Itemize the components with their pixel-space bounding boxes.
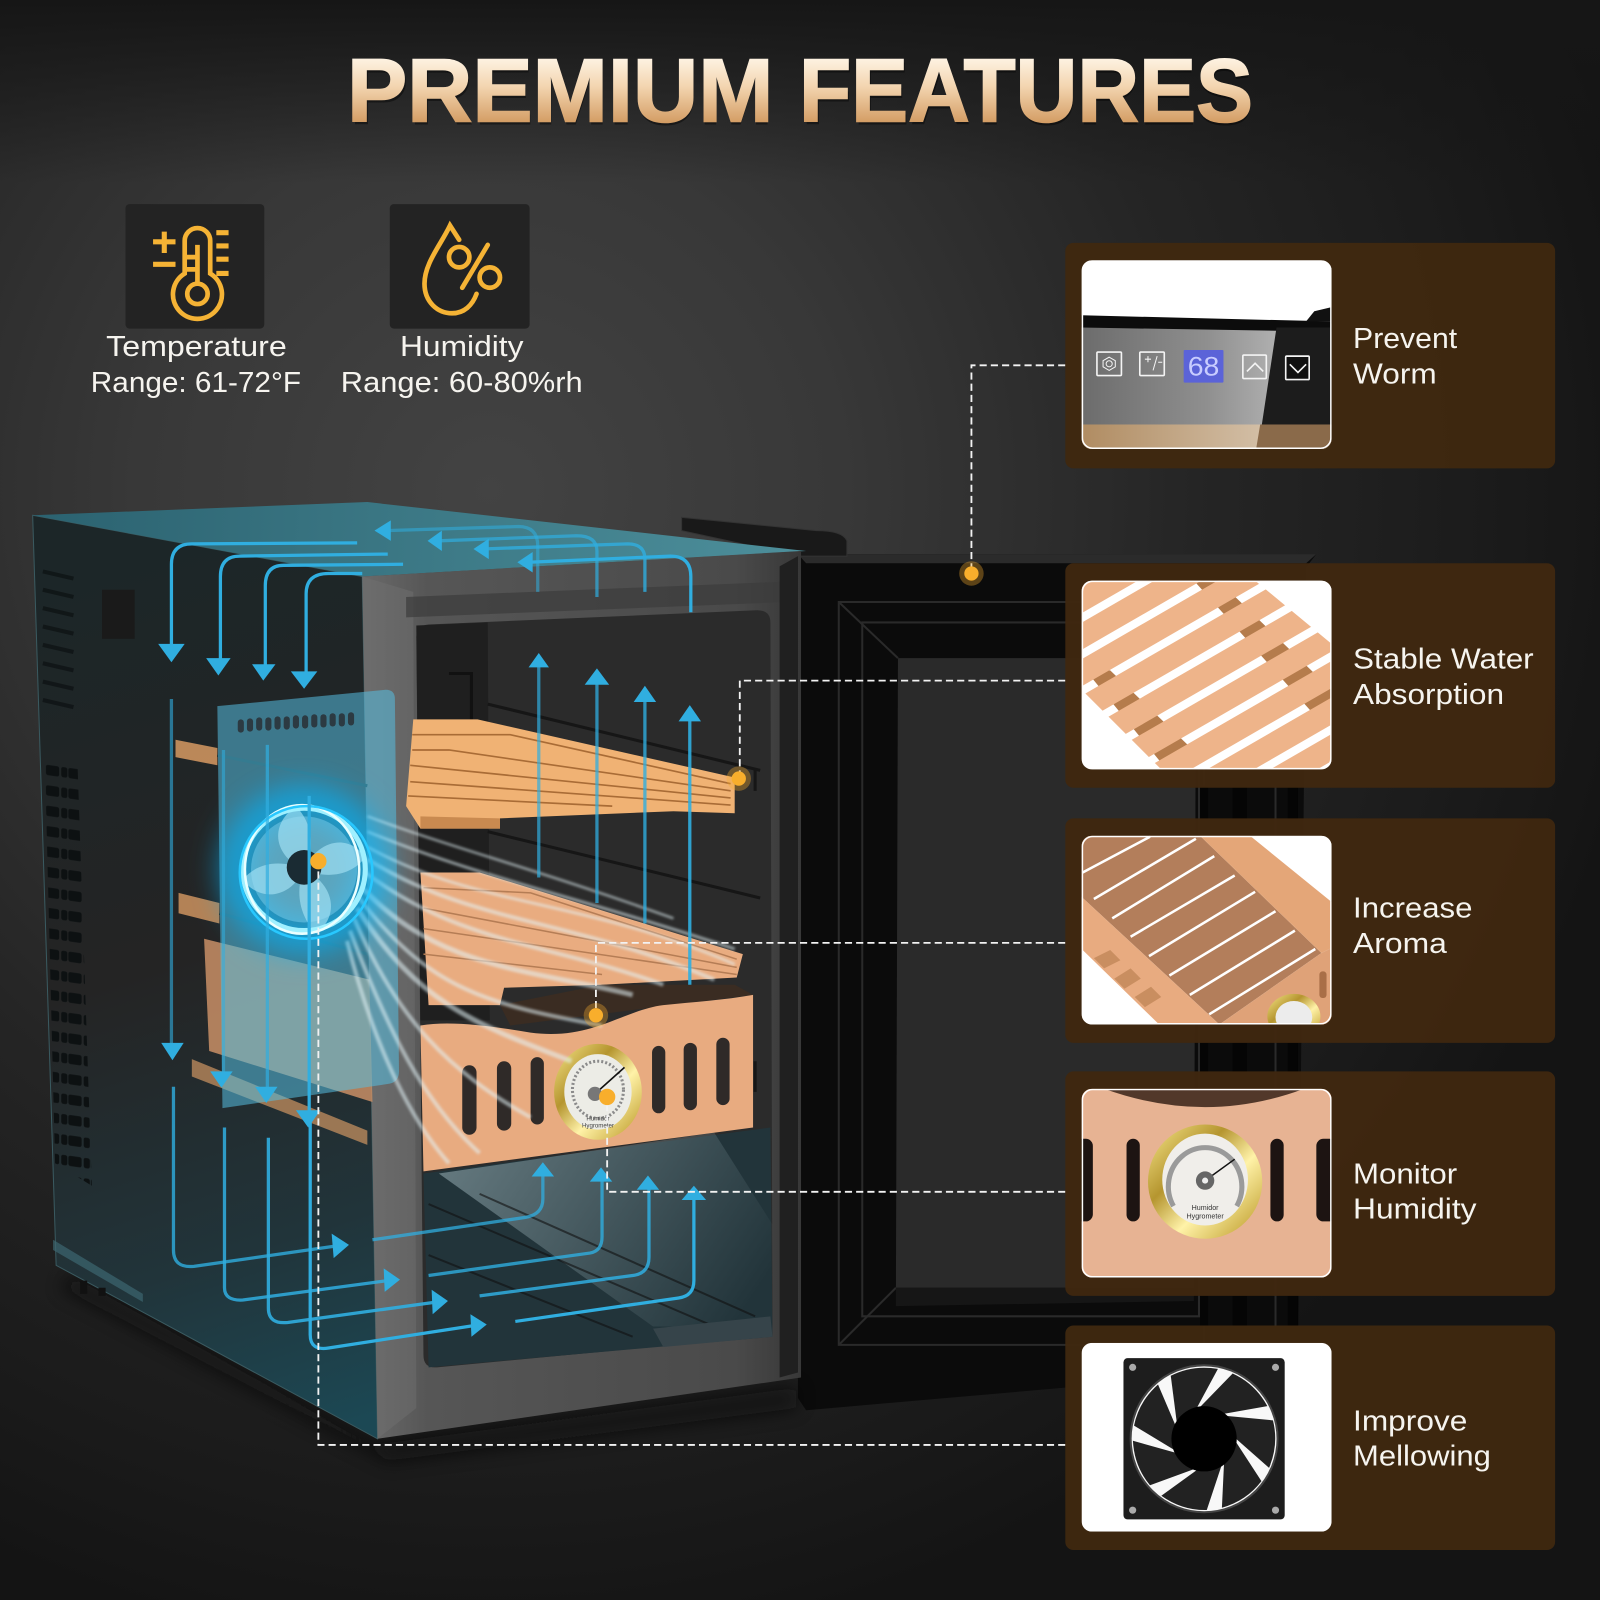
airflow arrows [158, 520, 706, 1348]
image: wooden shelf [1082, 580, 1332, 770]
label: increase aroma: Aroma [1353, 928, 1447, 960]
translucent blue panel [217, 690, 399, 1108]
icon: humidity drop [390, 204, 530, 329]
arrows descending on the left side [158, 543, 403, 1128]
text: humidity range: Humidity [400, 331, 524, 363]
image: hygrometer: Hygrometer [1186, 1212, 1224, 1220]
text: temperature range [91, 331, 301, 399]
spec: humidity [341, 204, 583, 399]
label: prevent worm: Prevent [1353, 323, 1457, 355]
airflow streams [347, 816, 735, 1163]
icon: thermometer [126, 204, 264, 329]
title: PREMIUM [349, 44, 773, 144]
image: wooden tray [1082, 836, 1332, 1024]
label: stable water absorption: Absorption [1353, 679, 1504, 711]
label: improve mellowing: Mellowing [1353, 1440, 1491, 1472]
text: temperature range: Temperature [106, 331, 287, 363]
label: monitor humidity: Monitor [1353, 1159, 1458, 1191]
label: stable water absorption [1353, 643, 1534, 711]
door [682, 517, 1316, 1410]
arrows rising through the chamber [529, 653, 701, 985]
door handle [682, 517, 847, 556]
card: increase aroma [1065, 818, 1555, 1043]
hygrometer: Hygrometer [582, 1123, 614, 1130]
card: monitor humidity [1065, 1071, 1555, 1296]
middle shelf [420, 872, 743, 1005]
image: control panel: 68 [1188, 352, 1219, 382]
text: humidity range: Range: 60-80%rh [341, 367, 583, 399]
label: improve mellowing: Improve [1353, 1406, 1467, 1438]
title: FEATURES [799, 41, 1253, 141]
text: humidity range [341, 331, 583, 399]
text: temperature range: Range: 61-72°F [91, 367, 301, 399]
image: hygrometer [1082, 1088, 1332, 1278]
arrows along the floor [173, 1087, 487, 1348]
image: hygrometer: Humidor [1192, 1204, 1219, 1212]
cabinet top glass [33, 502, 806, 577]
spec: temperature [91, 204, 301, 399]
arrows across the top [374, 520, 691, 612]
cabinet shadow [61, 1276, 796, 1461]
left-side shelves seen through glass [176, 740, 372, 1145]
callout dots [310, 561, 984, 1105]
label: stable water absorption: Stable Water [1353, 643, 1534, 675]
upper shelf [406, 719, 735, 829]
chamber interior [416, 610, 772, 1367]
label: increase aroma: Increase [1353, 892, 1472, 924]
title: FEATURES [801, 44, 1253, 144]
cabinet left side [33, 515, 378, 1439]
hygrometer: Humidor [586, 1115, 610, 1122]
label: prevent worm [1353, 323, 1457, 391]
callout lines [318, 365, 1065, 1445]
image: cooling fan [1082, 1342, 1332, 1532]
humidor drawer [420, 985, 753, 1171]
fan glow [237, 802, 372, 939]
label: monitor humidity: Humidity [1353, 1193, 1477, 1225]
card: improve mellowing [1065, 1326, 1555, 1550]
label: prevent worm: Worm [1353, 359, 1437, 391]
label: increase aroma [1353, 892, 1472, 960]
label: improve mellowing [1353, 1406, 1491, 1472]
title [347, 41, 1253, 144]
hygrometer [554, 1044, 642, 1140]
cabinet [33, 502, 806, 1439]
arrows rising to the drawer [372, 1162, 706, 1321]
card: prevent worm [1065, 243, 1555, 468]
label: monitor humidity [1353, 1159, 1477, 1225]
cabinet front frame [362, 551, 801, 1439]
card: stable water absorption [1065, 563, 1555, 788]
image: control panel [1082, 260, 1332, 449]
title: PREMIUM [347, 41, 773, 141]
